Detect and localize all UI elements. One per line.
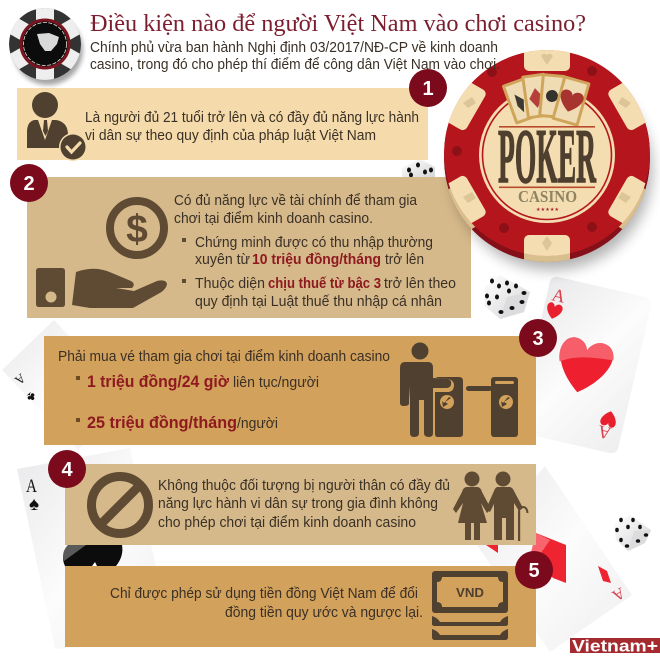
- panel 1 text: [85, 110, 419, 144]
- bullet 1: liên tục/người: [233, 375, 319, 391]
- bullet 2: 25 triệu đồng/tháng: [87, 413, 237, 432]
- card corner: A and spade: [26, 476, 39, 515]
- die: bottom right: [614, 515, 651, 551]
- icon: coin: $: [126, 208, 148, 251]
- panel 5: currency: [65, 566, 536, 647]
- suit marks on blocks: [463, 54, 631, 251]
- icon: person with check: [27, 92, 87, 161]
- panel 5 text: Chỉ được phép sử dụng tiền đồng Việt Nam để đổi: [110, 586, 418, 602]
- panel 5 text: đồng tiền quy ước và ngược lại.: [225, 605, 423, 621]
- small chip ring: [8, 7, 82, 81]
- panel 4 text: năng lực hành vi dân sự trong gia đình không: [158, 496, 438, 512]
- card corner: A and club: ♣: [23, 389, 40, 406]
- panel 5 text: [110, 586, 423, 621]
- bullet: tax: trở lên theo: [384, 276, 456, 292]
- small heart bottom: [599, 409, 618, 428]
- panel 4 text: cho phép chơi tại điểm kinh doanh casino: [158, 515, 416, 531]
- chip edge: [444, 154, 650, 262]
- intro text: Chính phủ vừa ban hành Nghị định 03/2017/NĐ-CP về kinh doanh: [90, 39, 498, 56]
- fan of playing cards: [502, 73, 591, 127]
- card letter A bottom: A: [596, 421, 613, 444]
- bullet: income: [182, 235, 433, 268]
- panel 4 text: [158, 478, 450, 531]
- badge 4: [48, 450, 86, 488]
- badge 3: 3: [532, 328, 544, 350]
- card: ace of diamonds: [477, 466, 632, 652]
- bullet: tax: Thuộc diện: [195, 276, 265, 292]
- bullet: income: xuyên từ: [195, 252, 250, 268]
- bullet 1: 1 triệu đồng/24 giờ: [87, 372, 230, 391]
- badge 2: 2: [23, 173, 35, 195]
- suit marks on red: [452, 66, 597, 233]
- bullet 1: [76, 372, 319, 391]
- badge 1: [409, 69, 447, 107]
- small diamond left: [486, 545, 498, 553]
- badge 1: 1: [422, 78, 434, 100]
- decorative rules: [499, 126, 595, 188]
- bullet 2: /người: [237, 416, 278, 432]
- panel 2 intro: Có đủ năng lực về tài chính để tham gia: [174, 193, 418, 209]
- panel 3 heading: Phải mua vé tham gia chơi tại điểm kinh doanh casino: [58, 349, 390, 365]
- badge 3: [519, 319, 557, 357]
- panel 2 intro: chơi tại điểm kinh doanh casino.: [174, 211, 373, 227]
- card corner: A and club: [11, 371, 40, 406]
- icon: VND banknotes: [432, 571, 508, 640]
- panel 4: family consent: [65, 464, 536, 545]
- icon: hand: [36, 268, 167, 308]
- die: behind panels: [402, 159, 435, 178]
- CASINO wordmark: CASINO: [518, 187, 577, 206]
- Vietnam+ logo: Vietnam+: [572, 636, 658, 656]
- panel 2 intro: [174, 193, 418, 227]
- small chip logo: [8, 7, 83, 85]
- panel 1: age: [17, 88, 428, 161]
- icon: prohibition sign: [92, 476, 148, 534]
- large diamond: [531, 533, 566, 583]
- bullet: tax: chịu thuế từ bậc 3: [268, 276, 381, 292]
- badge 2: [10, 164, 48, 202]
- large heart: [552, 335, 616, 398]
- diamond highlight: [531, 533, 550, 553]
- icon: coin: [110, 201, 164, 255]
- bullet: income: trở lên: [385, 252, 424, 268]
- panel 4 text: Không thuộc đối tượng bị người thân có đầy đủ: [158, 478, 450, 494]
- panel 3: ticket: [44, 336, 536, 445]
- badge 5: 5: [528, 560, 540, 582]
- card: ace of hearts: [515, 275, 653, 455]
- panel 1 text: vi dân sự theo quy định của pháp luật Việt Nam: [85, 128, 376, 144]
- icon: elderly couple: [453, 472, 528, 541]
- card letter A: A: [609, 584, 628, 604]
- card: ace of clubs: [2, 320, 130, 450]
- card corner: A and spade: A: [26, 476, 37, 497]
- bullet: tax: quy định tại Luật thuế thu nhập cá nhân: [195, 294, 442, 310]
- chip face: [444, 47, 650, 259]
- bullet: income: 10 triệu đồng/tháng: [252, 252, 381, 268]
- chip shadow: [452, 70, 652, 270]
- stars: ★★★★★: [536, 207, 560, 213]
- intro text: [90, 39, 500, 73]
- intro text: casino, trong đó cho phép thí điểm để công dân Việt Nam vào chơi.: [90, 56, 500, 73]
- small diamond: [598, 566, 611, 583]
- small chip centre: [21, 20, 69, 68]
- large spade: [63, 545, 122, 566]
- panel 1 text: Là người đủ 21 tuổi trở lên và có đầy đủ năng lực hành: [85, 110, 419, 126]
- panel 2: finance: [27, 177, 471, 318]
- poker chip: [444, 47, 652, 270]
- bullet: income: Chứng minh được có thu nhập thường: [195, 235, 433, 251]
- card corner: A and spade: ♠: [29, 494, 39, 515]
- small heart: [545, 302, 564, 321]
- die: centre right: [484, 275, 530, 319]
- heart highlight: [558, 334, 617, 373]
- badge 5: [515, 551, 553, 589]
- badge 4: 4: [61, 459, 73, 481]
- card corner: A and club: A: [11, 371, 29, 389]
- title: Điều kiện nào để người Việt Nam vào chơi casino?: [90, 11, 586, 37]
- card: ace of spades: [17, 448, 172, 649]
- bullet: tax: [182, 276, 456, 310]
- icon: person at turnstile: [400, 342, 518, 437]
- card letter A: A: [550, 284, 567, 307]
- inner medallion: [479, 87, 615, 223]
- icon: VND banknotes: VND: [456, 585, 484, 600]
